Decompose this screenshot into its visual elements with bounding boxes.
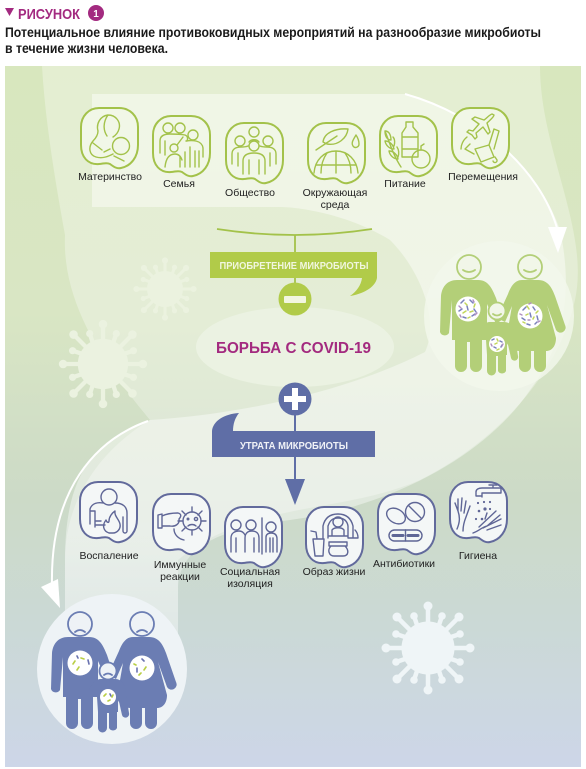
icon: Социальная изоляция	[225, 507, 282, 567]
icon: Питание	[380, 116, 437, 176]
icon: virus bottom right	[382, 602, 474, 694]
ellipse: COVID-19: БОРЬБА С COVID-19	[216, 340, 371, 357]
heads: unhealthy	[68, 612, 154, 680]
banner: acquisition: ПРИОБРЕТЕНИЕ МИКРОБИОТЫ	[220, 260, 368, 272]
icon: virus pale large	[59, 320, 147, 408]
arrow: white to unhealthy family	[41, 421, 148, 608]
circle: healthy family	[424, 241, 574, 391]
icon: plus	[278, 382, 312, 416]
circle: unhealthy family	[37, 594, 187, 744]
figures: healthy bodies	[440, 280, 566, 376]
banner: loss: УТРАТА МИКРОБИОТЫ	[240, 440, 348, 452]
icon: Семья	[153, 116, 210, 176]
icon: virus pale small	[133, 257, 197, 321]
ellipse: COVID-19	[196, 307, 394, 387]
label: Семья: Семья	[163, 178, 195, 190]
label: Антибиотики: Антибиотики	[373, 558, 435, 570]
connector: loss stem	[294, 399, 296, 485]
label: Общество: Общество	[225, 187, 275, 199]
icon: Общество	[226, 123, 283, 183]
bellies: rich microbiota	[456, 296, 542, 352]
icon: Перемещения	[452, 108, 509, 168]
figures: unhealthy bodies	[51, 637, 177, 732]
icon: Воспаление	[80, 482, 137, 542]
label: Социальная изоляция: Социальная	[220, 566, 280, 578]
icon: minus	[278, 282, 312, 316]
banner: loss	[212, 413, 375, 457]
label: Материнство: Материнство	[78, 171, 142, 183]
icon: Образ жизни	[306, 507, 363, 567]
icon: Иммунные реакции	[153, 494, 210, 554]
label: Перемещения: Перемещения	[448, 171, 518, 183]
label: Социальная изоляция: изоляция	[227, 578, 273, 590]
label: Иммунные реакции: Иммунные	[154, 559, 206, 571]
label: Окружающая среда: среда	[321, 199, 349, 211]
label: Иммунные реакции: реакции	[160, 571, 200, 583]
badge: figure number	[88, 5, 104, 21]
label: Питание: Питание	[384, 178, 426, 190]
label: Образ жизни: Образ жизни	[303, 566, 366, 578]
arrow: loss down	[285, 479, 305, 505]
icon: Антибиотики	[378, 494, 435, 554]
label: Окружающая среда: Окружающая	[303, 187, 367, 199]
label: Гигиена: Гигиена	[459, 550, 497, 562]
icon: triangle marker	[5, 8, 14, 16]
title: в течение жизни человека.	[5, 41, 168, 56]
icon: Гигиена	[450, 482, 507, 542]
badge: figure number: 1	[93, 9, 99, 20]
connector: acquisition bracket	[217, 229, 372, 285]
label: Воспаление: Воспаление	[79, 550, 139, 562]
title: Потенциальное влияние противоковидных мероприятий на разнообразие микробиоты	[5, 25, 541, 40]
icon: Окружающая среда	[308, 123, 365, 183]
arrow: white top to healthy family	[405, 94, 567, 253]
heads: healthy	[457, 255, 542, 320]
banner: acquisition	[210, 252, 377, 296]
icon: Материнство	[81, 108, 138, 168]
bellies: poor microbiota	[68, 650, 154, 705]
heading: figure label: РИСУНОК	[18, 6, 81, 23]
